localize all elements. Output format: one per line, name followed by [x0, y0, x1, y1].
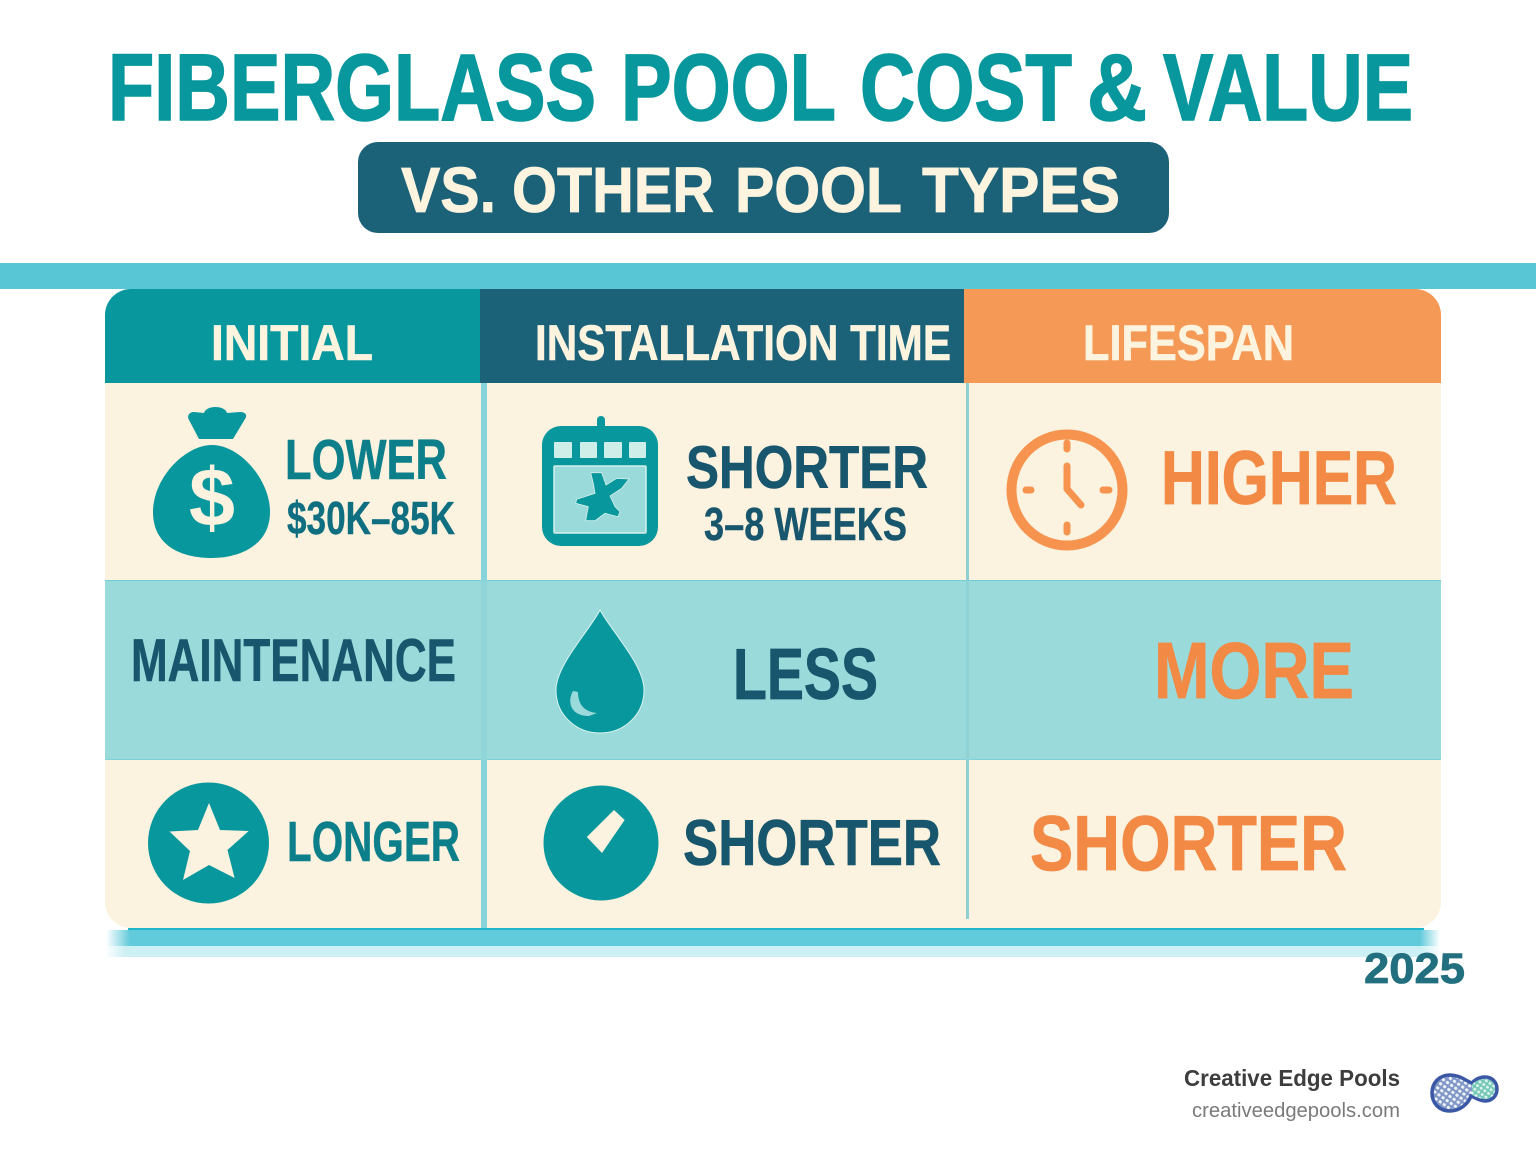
header: installation time: INSTALLATION TIME — [535, 315, 951, 371]
header: initial: INITIAL — [211, 315, 373, 371]
brand text: Creative Edge Pools — [1184, 1065, 1400, 1091]
cell: lower — [285, 428, 455, 544]
title: VALUE — [1163, 35, 1413, 141]
icon: pool logo — [1432, 1075, 1497, 1111]
title: COST — [860, 35, 1072, 141]
comparison table — [105, 289, 1441, 928]
cell: shorter right: SHORTER — [1030, 799, 1347, 887]
subtitle pill: POOL — [735, 154, 902, 226]
cell: higher: HIGHER — [1161, 436, 1397, 521]
subtitle pill: TYPES — [922, 154, 1120, 226]
icon: check badge — [544, 786, 658, 900]
year label: 2025 — [1364, 945, 1465, 993]
table rows background — [105, 383, 1441, 928]
cell: shorter 3-8 weeks: 3–8 WEEKS — [704, 498, 907, 550]
cell: less: LESS — [733, 635, 878, 715]
subtitle pill — [358, 142, 1169, 233]
icon: clock — [1012, 434, 1122, 546]
icon: money bag: $ — [189, 451, 235, 544]
subtitle pill: VS. — [401, 154, 496, 226]
brand text: creativeedgepools.com — [1192, 1100, 1400, 1122]
top band — [0, 263, 1536, 289]
icon: water drop — [556, 610, 644, 733]
cell: longer: LONGER — [287, 810, 460, 874]
title: & — [1087, 35, 1147, 141]
cell: shorter 3-8 weeks: SHORTER — [686, 434, 928, 501]
title: FIBERGLASS — [108, 35, 596, 141]
title — [108, 35, 1413, 141]
title: POOL — [621, 35, 836, 141]
cell: shorter middle: SHORTER — [683, 806, 941, 879]
icon: star badge — [148, 782, 269, 904]
brand text — [1184, 1065, 1400, 1122]
header: lifespan: LIFESPAN — [1083, 315, 1294, 371]
table header — [105, 289, 1441, 383]
cell: shorter 3-8 weeks — [686, 434, 928, 550]
cell: lower: LOWER — [285, 428, 447, 492]
bottom shelf — [105, 928, 1441, 957]
cell: maintenance: MAINTENANCE — [131, 627, 456, 694]
subtitle pill: OTHER — [512, 154, 714, 226]
icon: money bag — [153, 407, 270, 558]
cell: more: MORE — [1154, 626, 1354, 715]
icon: calendar — [542, 416, 658, 546]
cell: lower: $30K–85K — [287, 492, 455, 544]
